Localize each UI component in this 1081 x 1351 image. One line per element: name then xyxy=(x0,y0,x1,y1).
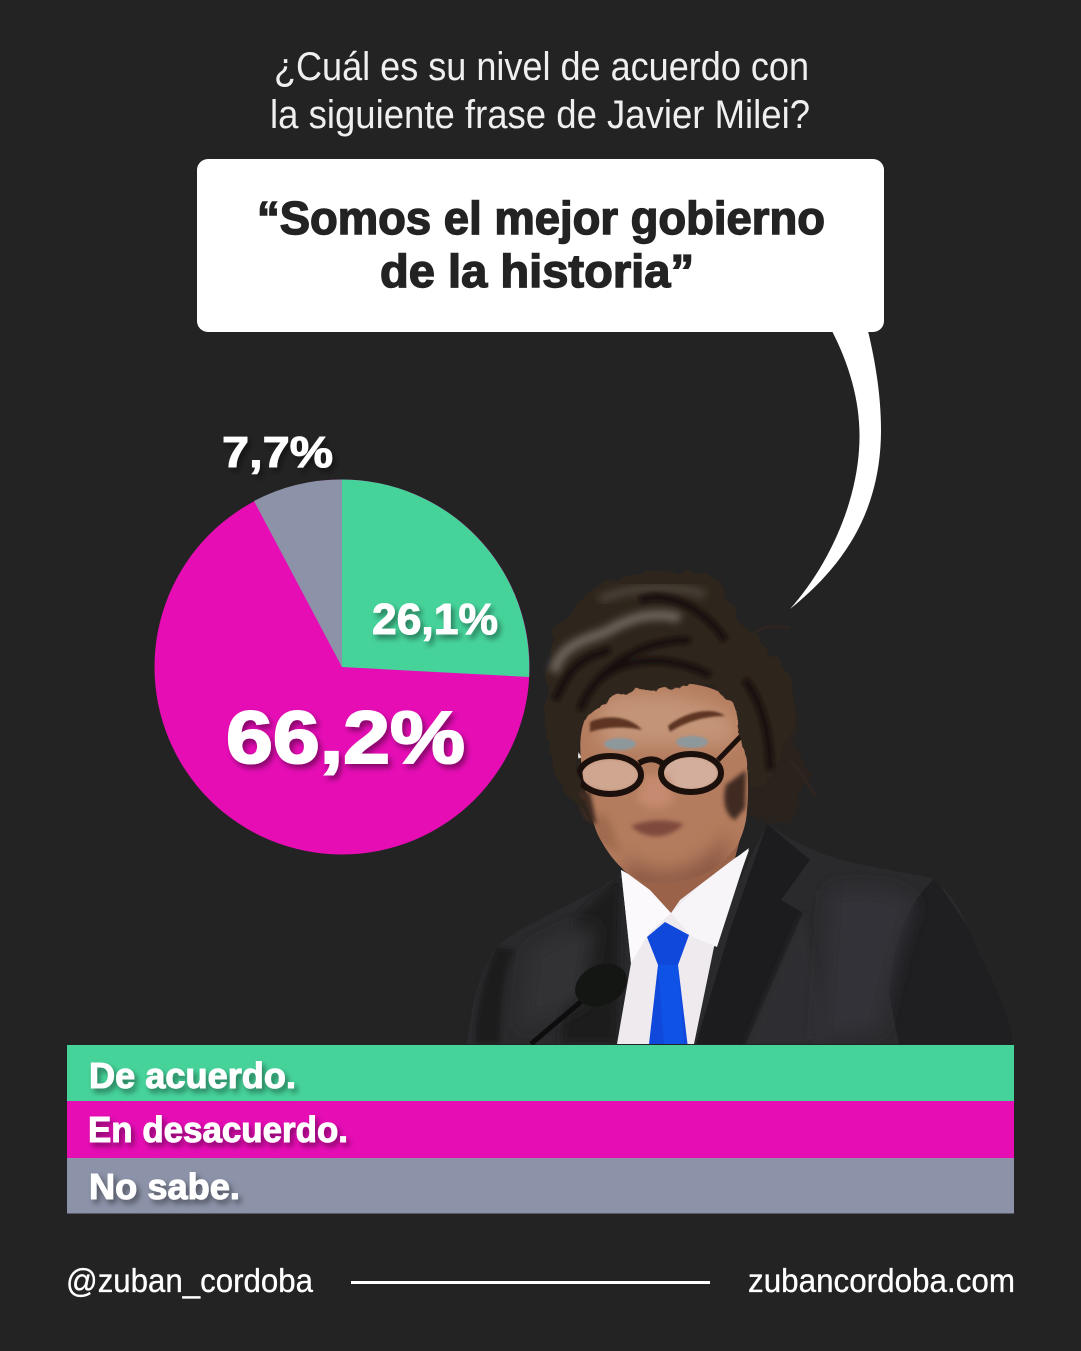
footer website: zubancordoba.com xyxy=(748,1262,1015,1299)
label: 26,1%: 26,1% xyxy=(372,595,498,644)
legend row: en desacuerdo xyxy=(67,1101,1014,1158)
quote text: “Somos el mejor gobierno xyxy=(257,192,825,244)
footer xyxy=(66,1262,1015,1299)
title: question xyxy=(270,45,810,137)
speech bubble with quote xyxy=(197,159,884,609)
eyebrows xyxy=(590,717,642,732)
legend xyxy=(67,1045,1014,1214)
footer handle: @zuban_cordoba xyxy=(66,1262,314,1299)
microphone xyxy=(531,994,590,1044)
label: 7,7%: 7,7% xyxy=(222,428,333,477)
hair back xyxy=(546,572,810,823)
eyes xyxy=(604,738,636,750)
hair top xyxy=(546,572,793,817)
legend row: de acuerdo: De acuerdo. xyxy=(89,1055,296,1096)
title: question: ¿Cuál es su nivel de acuerdo con xyxy=(274,45,809,89)
legend row: de acuerdo xyxy=(67,1045,1014,1101)
shirt xyxy=(617,850,749,1044)
jacket xyxy=(467,824,1013,1044)
legend row: en desacuerdo: En desacuerdo. xyxy=(88,1109,348,1150)
face xyxy=(580,683,748,884)
tie xyxy=(647,922,689,1044)
legend row: no sabe xyxy=(67,1158,1014,1214)
glasses xyxy=(577,733,744,794)
neck xyxy=(623,820,745,913)
title: question: la siguiente frase de Javier Milei? xyxy=(270,93,810,137)
pie chart xyxy=(154,428,530,854)
quote text: de la historia” xyxy=(380,245,694,297)
legend row: no sabe: No sabe. xyxy=(89,1166,240,1207)
label: 66,2%: 66,2% xyxy=(226,696,465,779)
quote text xyxy=(257,192,825,297)
portrait of Javier Milei xyxy=(467,572,1020,1044)
sideburns xyxy=(724,770,746,820)
nose and mouth xyxy=(637,775,674,808)
